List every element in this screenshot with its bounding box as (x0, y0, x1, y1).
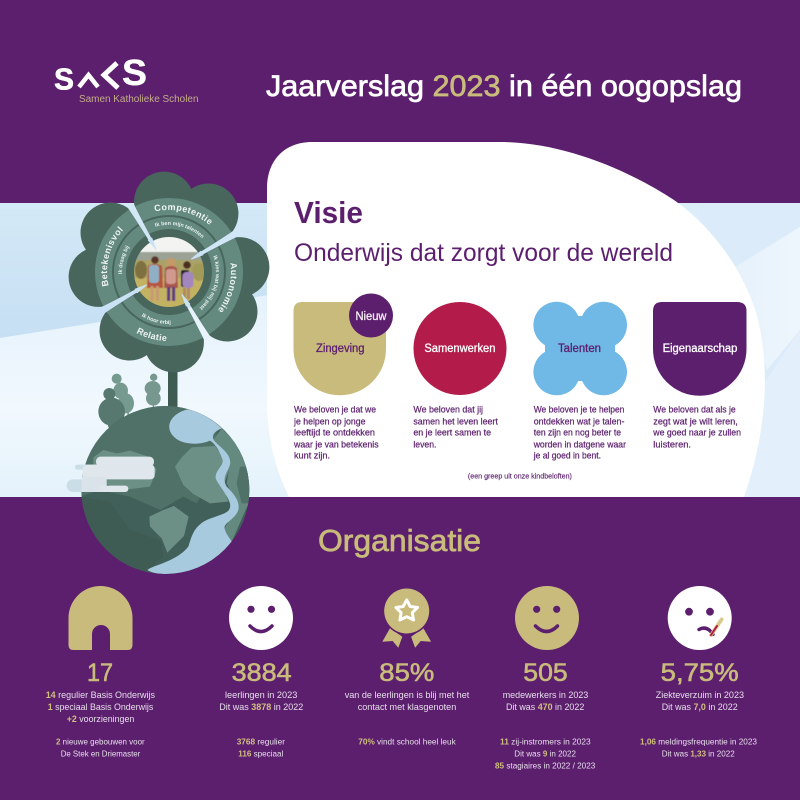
stat: staff: 85 stagiaires in 2022 / 2023 (495, 760, 596, 770)
shape: Samenwerken (414, 302, 506, 395)
white vision panel (267, 142, 765, 497)
cloud (67, 457, 155, 492)
stat: schools: 1 speciaal Basis Onderwijs (48, 702, 154, 712)
left child (151, 256, 159, 264)
ring labels (101, 204, 237, 341)
vision heading: Visie (294, 195, 363, 230)
text: promise Eigenaarschap: luisteren. (653, 438, 691, 449)
text: promise Zingeving: je helpen op jonge (293, 415, 366, 426)
stat: absence: 1,06 meldingsfrequentie in 2023 (640, 736, 757, 746)
text: promise Samenwerken: leven. (413, 438, 436, 449)
icon: white smiley (229, 586, 293, 650)
ring labels: Autonomie (218, 263, 237, 312)
shape: Talenten: Talenten (558, 343, 601, 355)
ring labels: Relatie (136, 328, 166, 341)
stat: satisfaction: 85% (379, 659, 434, 687)
clover with four leaves (68, 172, 270, 372)
water (147, 409, 239, 574)
stat: schools: 14 regulier Basis Onderwijs (46, 690, 155, 700)
stat: staff: medewerkers in 2023 (503, 690, 588, 700)
text: promise Talenten: ontdekken wat je talen- (534, 415, 624, 426)
icon: school arch (68, 586, 132, 650)
stat: pupils: 3768 regulier (237, 736, 285, 746)
ring labels: Ik kies wat bij mij past (200, 255, 220, 310)
shape: Zingeving with Nieuw badge (294, 294, 393, 395)
text: promise Talenten: worden in datgene waar (533, 438, 626, 449)
text: promise Samenwerken (413, 404, 498, 449)
footnote: (een greep uit onze kindbeloften) (468, 472, 572, 481)
globe with trees and cloud (67, 374, 253, 577)
stat: pupils (219, 586, 303, 758)
shape: Eigenaarschap: Eigenaarschap (663, 343, 737, 355)
stat: absence (640, 586, 757, 758)
vision subheading: Onderwijs dat zorgt voor de wereld (294, 239, 673, 267)
ring labels: Betekenisvol (101, 226, 123, 286)
stat: absence: 5,75% (661, 659, 739, 687)
rings (104, 206, 234, 338)
stat: pupils: leerlingen in 2023 (225, 690, 297, 700)
text: promise Talenten: We beloven je te helpen (534, 404, 624, 415)
stat: schools: +2 voorzieningen (67, 714, 134, 724)
stat: schools (46, 586, 155, 758)
shape: Eigenaarschap (653, 302, 746, 396)
ring labels: Ik hoor erbij (142, 313, 170, 326)
text: promise Eigenaarschap: We beloven dat als je (653, 404, 736, 415)
earth (80, 403, 253, 577)
photo of three children (134, 237, 204, 307)
leaves (62, 165, 276, 379)
stat: absence: Dit was 1,33 in 2022 (662, 748, 735, 758)
stat: schools: De Stek en Driemaster (61, 748, 140, 758)
text: promise Samenwerken: en je leert samen te (413, 427, 491, 438)
text: promise Eigenaarschap: zegt wat je wilt leren, (653, 415, 738, 426)
trees (98, 374, 161, 433)
stat: schools: 2 nieuwe gebouwen voor (56, 736, 145, 746)
stat: satisfaction: contact met klasgenoten (358, 702, 456, 712)
text: promise Talenten: ten zijn en nog beter te (534, 427, 621, 438)
stat: satisfaction: van de leerlingen is blij met het (345, 690, 470, 700)
background band: light blue (0, 203, 800, 497)
stat: satisfaction (345, 587, 470, 746)
icon: sick face with thermometer (668, 586, 732, 650)
text: promise Zingeving (293, 404, 379, 461)
text: promise Eigenaarschap (652, 404, 741, 449)
stat: staff: Dit was 470 in 2022 (506, 702, 584, 712)
stat: pupils: Dit was 3878 in 2022 (219, 702, 303, 712)
text: promise Eigenaarschap: we goed naar je zullen (652, 427, 741, 438)
light gaps reaching into the photo (135, 238, 203, 306)
shape: Zingeving with Nieuw badge: Nieuw (356, 311, 387, 323)
icon: medal with star (382, 587, 431, 648)
text: promise Talenten: je al goed in bent. (533, 450, 601, 461)
stat: pupils: 116 speciaal (238, 748, 283, 758)
logo: Samen Katholieke Scholen (79, 94, 198, 105)
right child (183, 261, 191, 269)
logo: S (54, 62, 74, 96)
organisation heading: Organisatie (318, 523, 481, 558)
title: Jaarverslag 2023 in één oogopslag (266, 70, 742, 103)
text: promise Zingeving: waar je van betekenis (293, 438, 379, 449)
tree stem (168, 370, 178, 410)
text: promise Talenten (533, 404, 626, 461)
stat: staff: 11 zij-instromers in 2023 (500, 736, 591, 746)
ring labels: Competentie (154, 204, 212, 224)
stat: schools: 17 (87, 659, 113, 687)
text: promise Zingeving: leeftijd te ontdekken (294, 427, 375, 438)
stat: absence: Dit was 7,0 in 2022 (662, 702, 738, 712)
shape: Talenten (533, 302, 627, 395)
text: promise Zingeving: We beloven je dat we (294, 404, 376, 415)
text: promise Zingeving: kunt zijn. (294, 450, 330, 461)
shape: Samenwerken: Samenwerken (424, 343, 495, 355)
logo: S (122, 52, 147, 93)
logo (54, 52, 198, 105)
middle child (167, 258, 175, 268)
icon: gold smiley (515, 586, 579, 650)
stat: staff (495, 586, 596, 770)
ring labels: Ik ben mijn talenten (154, 222, 204, 238)
stat: staff: 505 (523, 659, 568, 687)
stat: absence: Ziekteverzuim in 2023 (656, 690, 744, 700)
stat: pupils: 3884 (232, 659, 292, 687)
text: promise Samenwerken: samen het leven leert (413, 415, 498, 426)
shape: Zingeving with Nieuw badge: Zingeving (316, 343, 364, 355)
ring labels: Ik draag bij (118, 245, 130, 274)
text: promise Samenwerken: We beloven dat jij (413, 404, 483, 415)
stat: satisfaction: 70% vindt school heel leuk (358, 736, 456, 746)
stat: staff: Dit was 9 in 2022 (514, 748, 576, 758)
